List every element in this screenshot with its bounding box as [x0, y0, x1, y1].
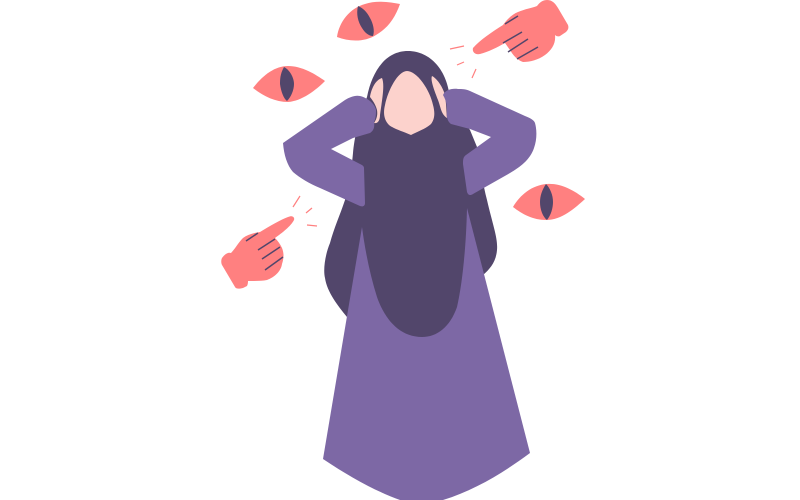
pupil — [357, 6, 374, 36]
eye: left — [253, 66, 325, 102]
right hand — [432, 76, 447, 118]
long hijab back — [324, 51, 497, 320]
scarf front — [362, 140, 467, 337]
left arm — [283, 96, 376, 206]
eye: right — [513, 184, 585, 220]
right arm — [443, 89, 536, 195]
left hand — [370, 78, 383, 123]
hand: top right pointing — [450, 0, 568, 78]
hand: bottom left pointing — [221, 196, 317, 289]
finger lines — [246, 233, 283, 270]
emphasis marks — [450, 46, 476, 78]
figure: woman in hijab — [283, 51, 536, 500]
face — [384, 71, 434, 135]
dress — [323, 208, 530, 500]
pupil — [280, 67, 294, 101]
pupil — [540, 184, 553, 220]
finger lines — [503, 16, 538, 59]
emphasis marks — [293, 196, 317, 226]
eye: top — [337, 2, 400, 41]
